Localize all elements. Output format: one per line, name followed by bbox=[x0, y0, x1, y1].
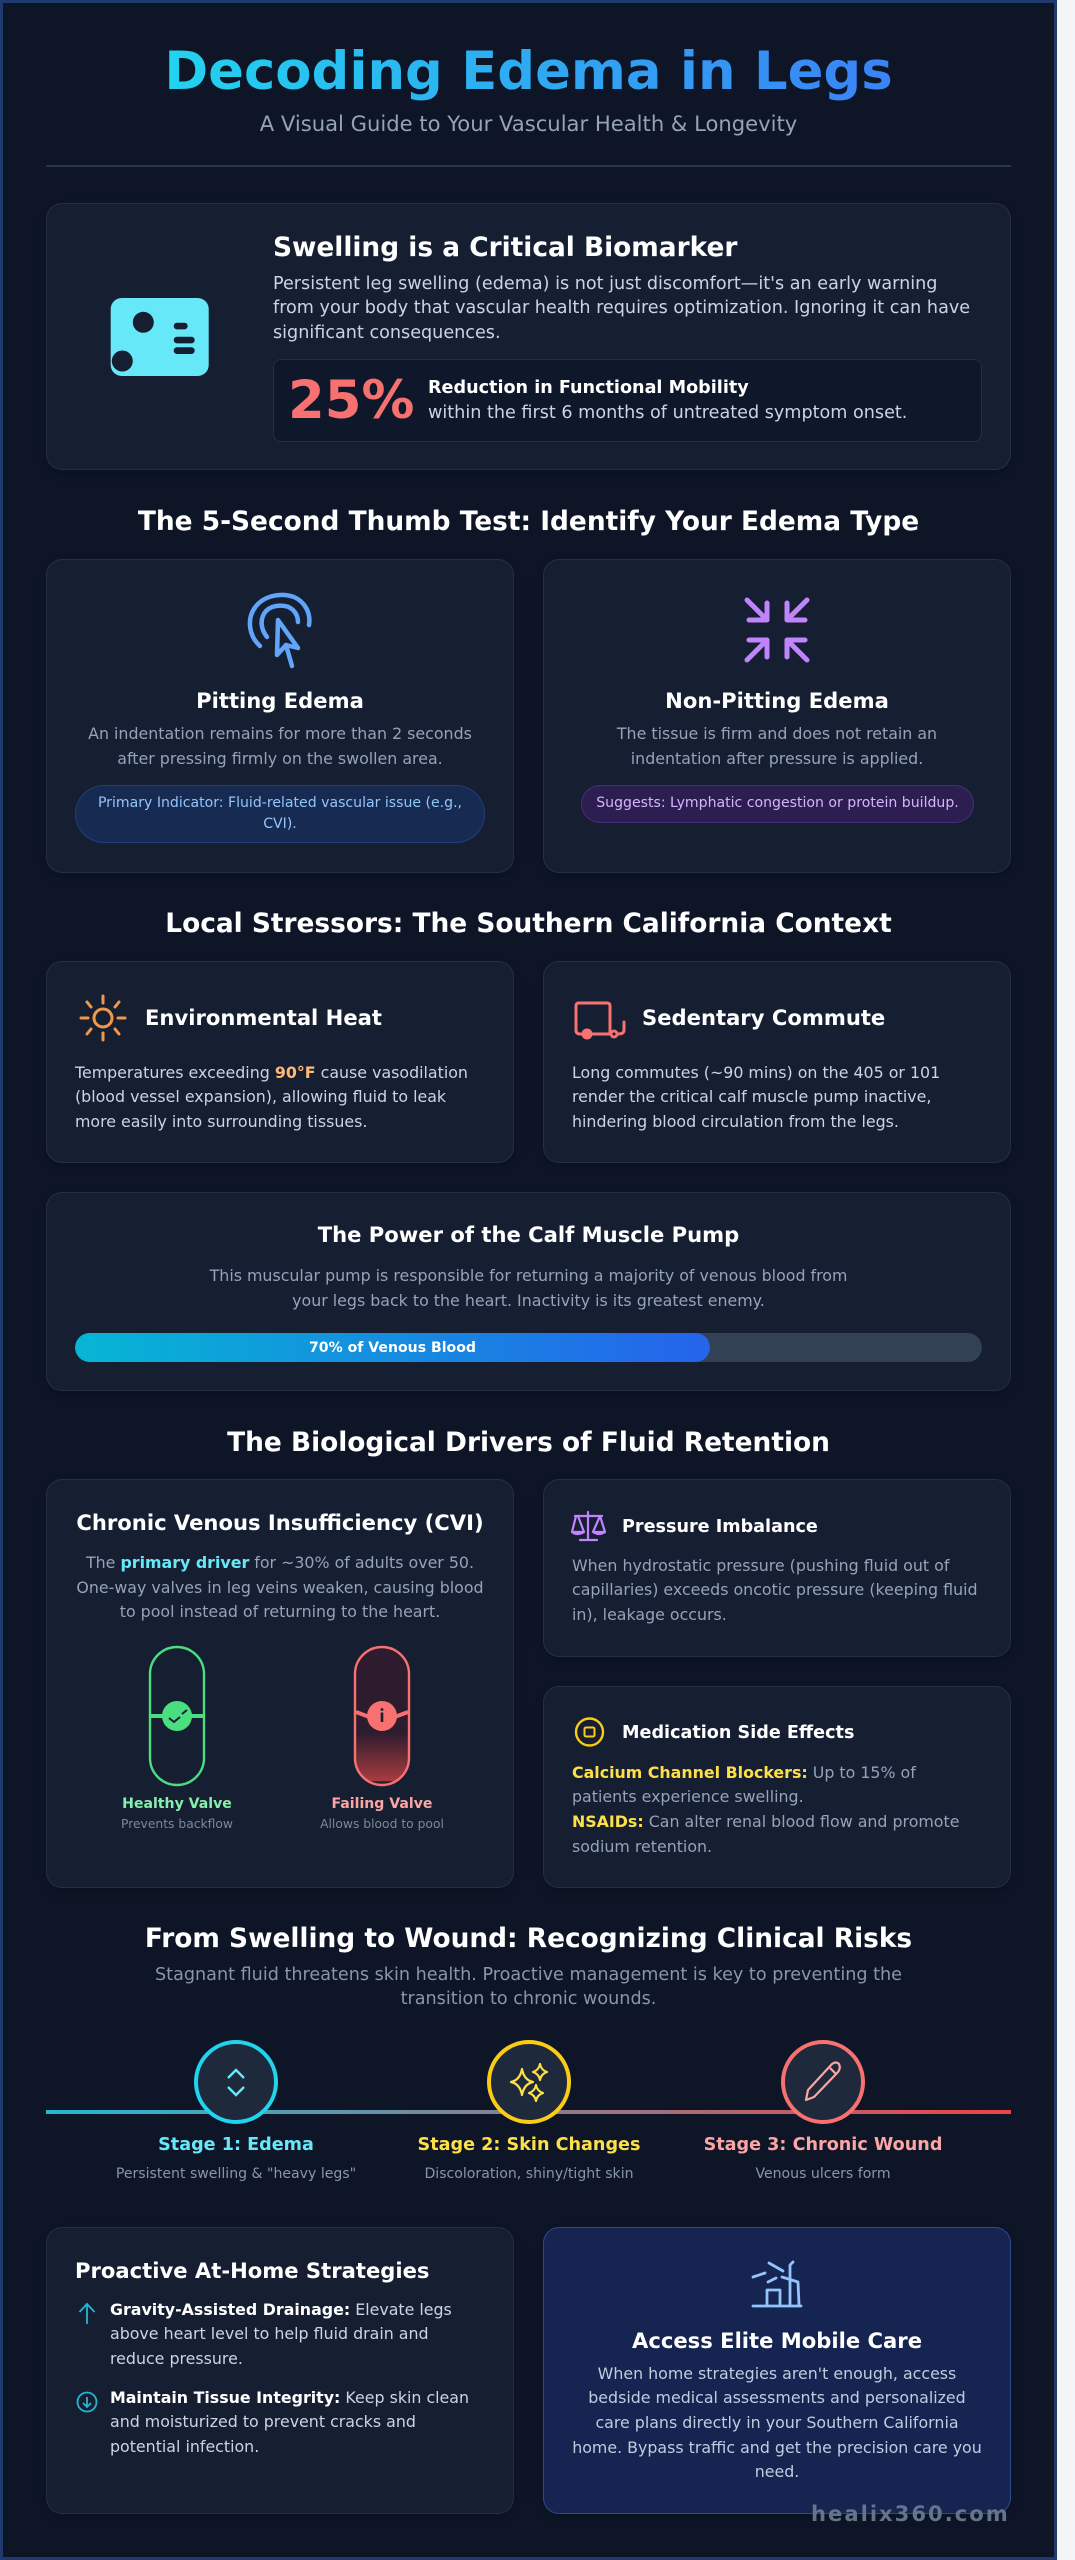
card title: Sedentary Commute bbox=[642, 1005, 885, 1030]
diagram: healthy valve bbox=[148, 1646, 206, 1786]
description: One-way valves in leg veins weaken, causing blood bbox=[76, 1578, 484, 1597]
body text: NSAIDs: Can alter renal blood flow and promote bbox=[572, 1812, 959, 1831]
stage 1 circle bbox=[194, 2040, 278, 2124]
progress fill: 70% of Venous Blood bbox=[309, 1340, 476, 1356]
heading: clinical risks: From Swelling to Wound: Recognizing Clinical Risks bbox=[145, 1923, 912, 1954]
icon: pill bbox=[574, 1717, 604, 1747]
body text: patients experience swelling. bbox=[572, 1787, 804, 1806]
strategy: drainage: Gravity-Assisted Drainage: Elevate legs bbox=[110, 2300, 452, 2319]
body text: hindering blood circulation from the legs. bbox=[572, 1112, 899, 1131]
icon: arrow up bbox=[78, 2302, 96, 2324]
title: Decoding Edema in Legs bbox=[164, 41, 893, 102]
icon: truck bbox=[574, 1002, 626, 1040]
stat number: 25% bbox=[288, 370, 414, 431]
card title: Proactive At-Home Strategies bbox=[75, 2258, 430, 2282]
indicator pill bbox=[581, 785, 974, 823]
body text bbox=[572, 1763, 959, 1856]
watermark: healix360.com bbox=[811, 2501, 1010, 2526]
strategy: drainage bbox=[110, 2300, 452, 2368]
card title: Medication Side Effects bbox=[622, 1723, 854, 1743]
body text: care plans directly in your Southern California bbox=[595, 2413, 959, 2432]
body text: When hydrostatic pressure (pushing fluid out of bbox=[572, 1556, 949, 1575]
panel: swelling biomarker bbox=[46, 203, 1011, 470]
progress fill bbox=[75, 1333, 710, 1362]
icon: compress arrows bbox=[744, 598, 810, 662]
description bbox=[76, 1553, 484, 1621]
body text: capillaries) exceeds oncotic pressure (keeping fluid bbox=[572, 1580, 978, 1599]
pill text: Suggests: Lymphatic congestion or protein buildup. bbox=[596, 795, 959, 811]
body text: render the critical calf muscle pump inactive, bbox=[572, 1087, 931, 1106]
pill text bbox=[98, 795, 462, 832]
strategy: tissue: and moisturized to prevent cracks and bbox=[110, 2412, 416, 2431]
timeline line bbox=[46, 2110, 1011, 2114]
stage 1 label: Stage 1: Edema bbox=[158, 2135, 314, 2155]
card title: Non-Pitting Edema bbox=[665, 688, 889, 713]
card title: Access Elite Mobile Care bbox=[632, 2328, 922, 2353]
heading: Swelling is a Critical Biomarker bbox=[273, 232, 737, 263]
progress bar bbox=[75, 1333, 982, 1362]
diagram: failing valve bbox=[354, 1646, 410, 1786]
stage 2 circle bbox=[487, 2040, 571, 2124]
panel: non-pitting edema bbox=[543, 559, 1011, 873]
description bbox=[616, 724, 937, 768]
stage 1 caption: Persistent swelling & "heavy legs" bbox=[116, 2166, 356, 2182]
description: after pressing firmly on the swollen area. bbox=[117, 749, 443, 768]
timeline: wound stages bbox=[46, 2040, 1011, 2182]
stat caption: Reduction in Functional Mobility bbox=[428, 378, 749, 398]
icon: pointer rays bbox=[248, 592, 312, 668]
body text: sodium retention. bbox=[572, 1837, 712, 1856]
description: The tissue is firm and does not retain an bbox=[617, 724, 937, 743]
body text: need. bbox=[755, 2462, 799, 2481]
stage 3 caption: Venous ulcers form bbox=[755, 2166, 891, 2182]
body text: more easily into surrounding tissues. bbox=[75, 1112, 367, 1131]
icon: chevrons bbox=[227, 2068, 245, 2097]
icon: pencil bbox=[804, 2061, 841, 2102]
body text: (blood vessel expansion), allowing fluid to leak bbox=[75, 1087, 446, 1106]
stage 3 circle bbox=[781, 2040, 865, 2124]
stage 2 caption: Discoloration, shiny/tight skin bbox=[424, 2166, 634, 2182]
panel: environmental heat bbox=[46, 961, 514, 1163]
strategy: tissue: potential infection. bbox=[110, 2437, 259, 2456]
description: The primary driver for ~30% of adults over 50. bbox=[86, 1553, 474, 1572]
body text: significant consequences. bbox=[273, 323, 501, 343]
body text: in), leakage occurs. bbox=[572, 1605, 727, 1624]
body text: bedside medical assessments and personalized bbox=[588, 2388, 966, 2407]
pill text: Primary Indicator: Fluid-related vascular issue (e.g., bbox=[98, 795, 462, 811]
strategy: tissue: Maintain Tissue Integrity: Keep skin clean bbox=[110, 2388, 469, 2407]
icon: sun bbox=[80, 994, 126, 1042]
card title: Pitting Edema bbox=[196, 688, 364, 713]
strategy: tissue bbox=[110, 2388, 469, 2456]
stat caption bbox=[428, 378, 907, 423]
panel: at-home strategies bbox=[46, 2227, 514, 2514]
stat box bbox=[273, 359, 982, 442]
strategy: drainage: reduce pressure. bbox=[110, 2349, 243, 2368]
icon: biomarker bbox=[110, 298, 209, 376]
card title: Environmental Heat bbox=[145, 1005, 382, 1030]
section intro bbox=[155, 1965, 902, 2009]
panel: chronic venous insufficiency bbox=[46, 1479, 514, 1888]
panel: pressure imbalance bbox=[543, 1479, 1011, 1657]
label: failing valve: Failing Valve bbox=[332, 1796, 432, 1812]
stat caption: within the first 6 months of untreated symptom onset. bbox=[428, 403, 907, 423]
body text bbox=[572, 1556, 978, 1624]
panel: sedentary commute bbox=[543, 961, 1011, 1163]
heading: local stressors: Local Stressors: The Southern California Context bbox=[165, 908, 892, 939]
panel: calf muscle pump bbox=[46, 1192, 1011, 1391]
card title: Pressure Imbalance bbox=[622, 1517, 818, 1537]
heading: thumb test: The 5-Second Thumb Test: Identify Your Edema Type bbox=[138, 506, 919, 537]
card title: Chronic Venous Insufficiency (CVI) bbox=[76, 1510, 484, 1535]
card title: The Power of the Calf Muscle Pump bbox=[318, 1222, 739, 1247]
body text: from your body that vascular health requires optimization. Ignoring it can have bbox=[273, 298, 970, 318]
label: healthy valve: Healthy Valve bbox=[122, 1796, 232, 1812]
body text: Long commutes (~90 mins) on the 405 or 101 bbox=[572, 1063, 940, 1082]
body text: Temperatures exceeding 90°F cause vasodilation bbox=[75, 1063, 468, 1082]
body text bbox=[74, 1063, 468, 1131]
panel: medication side effects bbox=[543, 1686, 1011, 1888]
pill text: CVI). bbox=[263, 816, 297, 832]
body text: When home strategies aren't enough, access bbox=[598, 2364, 956, 2383]
stage 3 label: Stage 3: Chronic Wound bbox=[704, 2135, 942, 2155]
caption: failing valve: Allows blood to pool bbox=[320, 1817, 444, 1831]
body text bbox=[273, 274, 970, 343]
panel: pitting edema bbox=[46, 559, 514, 873]
indicator pill bbox=[75, 785, 485, 843]
description: your legs back to the heart. Inactivity is its greatest enemy. bbox=[292, 1291, 765, 1310]
panel: elite mobile care bbox=[543, 2227, 1011, 2514]
description: indentation after pressure is applied. bbox=[631, 749, 923, 768]
icon: scale bbox=[570, 1510, 606, 1542]
caption: healthy valve: Prevents backflow bbox=[121, 1817, 233, 1831]
icon: mobile clinic bbox=[752, 2260, 802, 2308]
body text bbox=[572, 2364, 982, 2481]
description: An indentation remains for more than 2 seconds bbox=[88, 724, 472, 743]
body text: Persistent leg swelling (edema) is not just discomfort—it's an early warning bbox=[273, 274, 937, 294]
body text: home. Bypass traffic and get the precision care you bbox=[572, 2438, 982, 2457]
description bbox=[88, 724, 472, 768]
subtitle: A Visual Guide to Your Vascular Health & Longevity bbox=[260, 111, 797, 136]
section intro: Stagnant fluid threatens skin health. Proactive management is key to preventing the bbox=[155, 1965, 902, 1985]
description: to pool instead of returning to the heart. bbox=[120, 1602, 440, 1621]
heading: biological drivers: The Biological Drivers of Fluid Retention bbox=[227, 1427, 830, 1458]
section intro: transition to chronic wounds. bbox=[401, 1989, 656, 2009]
body text bbox=[572, 1063, 940, 1131]
icon: sparkles bbox=[510, 2062, 548, 2102]
description: This muscular pump is responsible for returning a majority of venous blood from bbox=[210, 1266, 847, 1285]
stage 2 label: Stage 2: Skin Changes bbox=[418, 2135, 640, 2155]
strategy: drainage: above heart level to help fluid drain and bbox=[110, 2324, 429, 2343]
body text: Calcium Channel Blockers: Up to 15% of bbox=[572, 1763, 916, 1782]
description bbox=[210, 1266, 847, 1310]
icon: arrow down circle bbox=[76, 2392, 98, 2412]
